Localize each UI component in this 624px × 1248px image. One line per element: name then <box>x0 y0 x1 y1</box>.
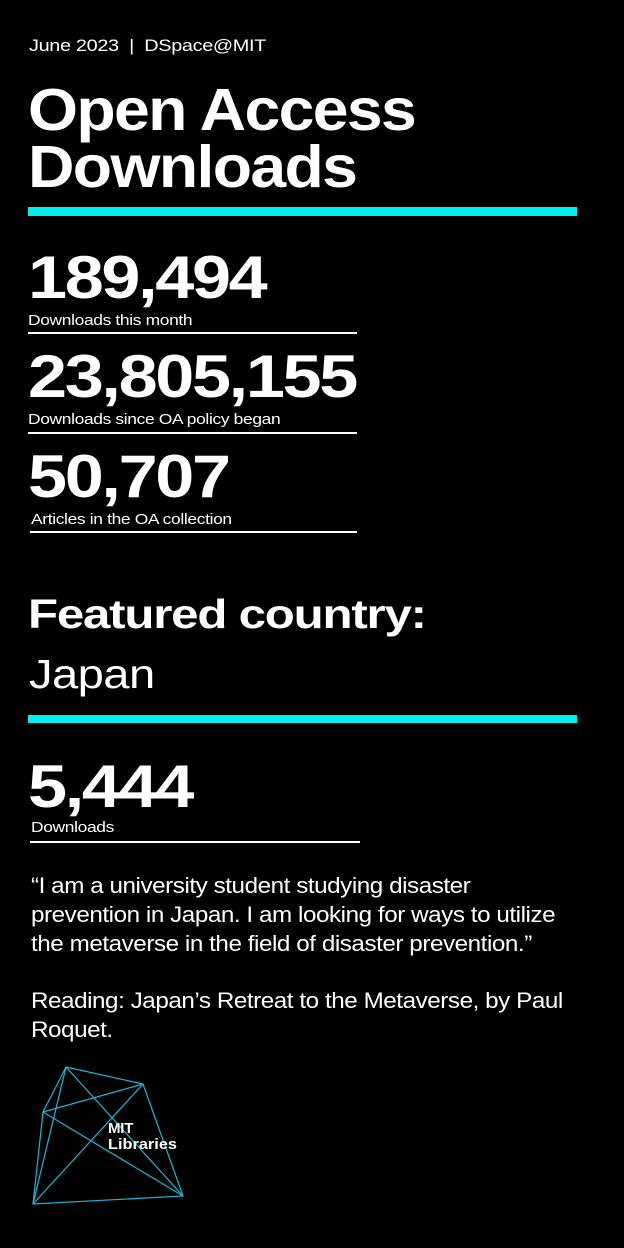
header: date and source: June 2023 | DSpace@MIT <box>29 36 266 55</box>
reading recommendation: Roquet. <box>31 1017 113 1042</box>
stat: downloads since OA policy: Downloads since OA policy began <box>28 411 280 428</box>
reading recommendation <box>31 988 563 1042</box>
country name: Japan <box>29 651 155 697</box>
stat: articles in OA collection <box>28 443 357 533</box>
logo: MIT Libraries: MIT <box>108 1120 133 1137</box>
stat: Japan downloads: 5,444 <box>28 753 192 820</box>
featured country heading: Featured country: <box>28 591 426 637</box>
cyan divider 2 <box>28 715 577 723</box>
title: Open Access <box>28 77 415 143</box>
stat: downloads this month: 189,494 <box>28 244 265 311</box>
stat: articles in OA collection: 50,707 <box>28 443 229 510</box>
stat: articles in OA collection: Articles in the OA collection <box>31 511 232 528</box>
quote: “I am a university student studying disaster <box>31 873 470 898</box>
reading recommendation: Reading: Japan’s Retreat to the Metaverse, by Paul <box>31 988 563 1013</box>
quote: the metaverse in the field of disaster prevention.” <box>31 931 532 956</box>
stat: downloads since OA policy: 23,805,155 <box>28 343 356 410</box>
stat: Japan downloads: Downloads <box>31 819 114 836</box>
title: Downloads <box>28 134 356 200</box>
logo: MIT Libraries: Libraries <box>108 1136 177 1153</box>
cyan divider <box>28 207 577 216</box>
logo: MIT Libraries <box>32 1066 184 1205</box>
stat: Japan downloads <box>28 753 360 843</box>
stat: downloads this month: Downloads this month <box>28 312 192 329</box>
quote: prevention in Japan. I am looking for ways to utilize <box>31 902 555 927</box>
title <box>28 77 415 200</box>
quote <box>31 873 555 956</box>
stat: downloads this month <box>28 244 357 334</box>
